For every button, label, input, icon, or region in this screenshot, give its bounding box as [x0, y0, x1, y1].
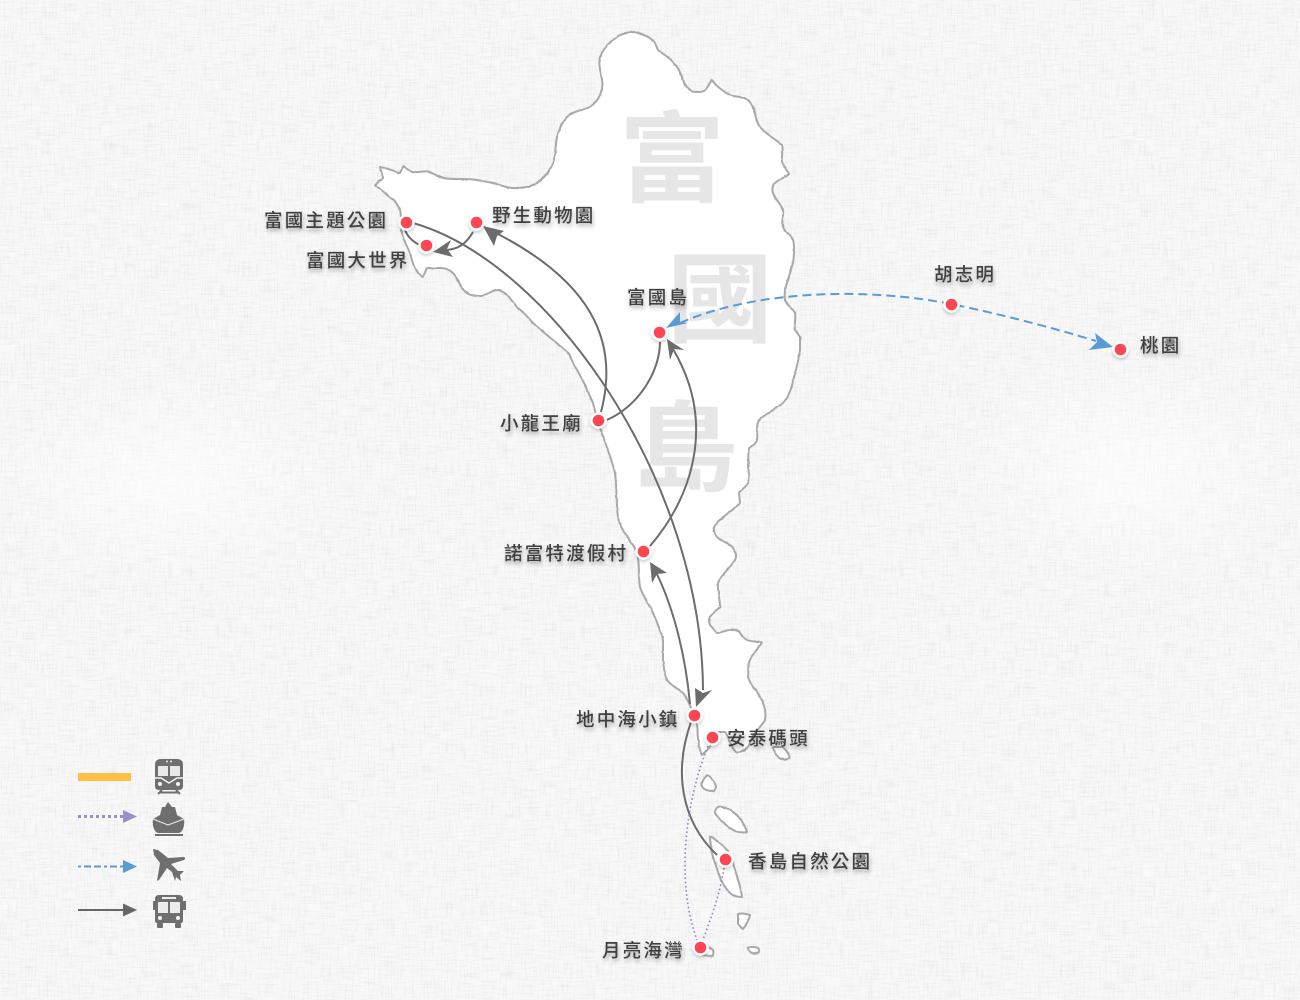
icon: bus [153, 895, 186, 928]
label: 諾富特渡假村: 諾富特渡假村 [504, 543, 628, 564]
flight route [666, 294, 1113, 350]
legend: rail line [78, 773, 131, 781]
watermark title: 富國島 [619, 104, 773, 504]
small islands [773, 747, 790, 759]
label: 安泰碼頭: 安泰碼頭 [727, 728, 810, 749]
label: 桃園: 桃園 [1140, 335, 1181, 356]
icon: train [155, 759, 183, 794]
label: 富國大世界: 富國大世界 [306, 250, 410, 271]
location dots [400, 216, 1128, 954]
legend: bus line [78, 904, 137, 916]
label: 小龍王廟: 小龍王廟 [500, 413, 583, 434]
watermark title: 富國島: 富 [619, 104, 725, 215]
label: 月亮海灣: 月亮海灣 [602, 940, 685, 961]
legend: flight line [78, 860, 137, 873]
main island outline [375, 32, 800, 755]
icon: plane [153, 849, 185, 881]
bus route arrowheads [433, 226, 712, 707]
label: 地中海小鎮: 地中海小鎮 [576, 709, 680, 730]
label: 富國島: 富國島 [627, 287, 689, 308]
label: 野生動物園: 野生動物園 [492, 205, 596, 226]
label: 香島自然公園: 香島自然公園 [748, 851, 872, 872]
icon: ship [153, 802, 184, 836]
watermark title: 富國島: 國 [667, 244, 773, 355]
label: 富國主題公園: 富國主題公園 [264, 210, 388, 231]
map: Phu Quoc island [375, 32, 800, 956]
label: 胡志明: 胡志明 [934, 264, 996, 285]
watermark title: 富國島: 島 [632, 393, 738, 504]
ferry routes [685, 746, 724, 940]
bus routes [405, 223, 717, 855]
legend: ferry line [78, 810, 137, 823]
